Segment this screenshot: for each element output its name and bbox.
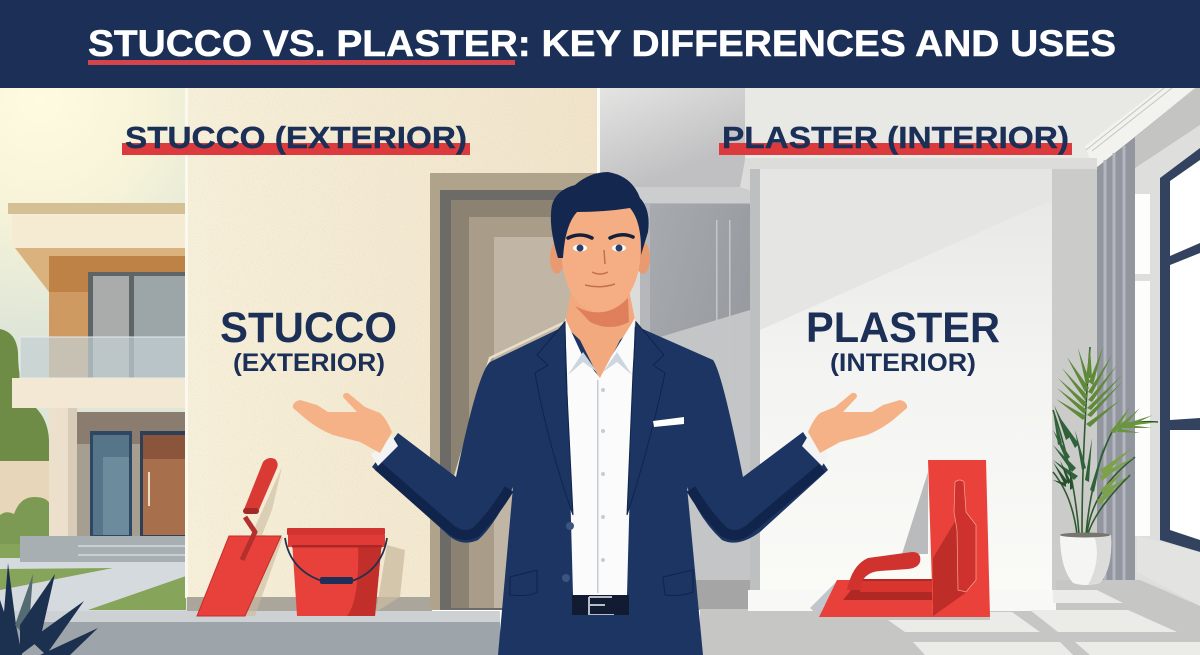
label: plaster: PLASTER — [806, 304, 1000, 352]
house balcony and slab — [12, 337, 186, 408]
pocket square — [653, 417, 684, 427]
door recess — [430, 173, 600, 610]
hair — [551, 172, 649, 258]
label: plaster — [806, 304, 1000, 377]
steps and pathway — [0, 536, 186, 618]
dark left frond leaves — [1053, 405, 1104, 492]
jacket pockets — [510, 570, 693, 596]
house ground floor with doors — [49, 408, 186, 538]
panel: interior room — [600, 88, 1200, 610]
title: STUCCO VS. PLASTER: KEY DIFFERENCES AND USES — [88, 22, 1116, 64]
collar folds — [568, 352, 632, 375]
small dark frond leaves — [1053, 460, 1073, 490]
main frond leaves — [1056, 347, 1122, 427]
neck shadow — [575, 298, 629, 327]
pot — [1060, 532, 1111, 585]
neck — [565, 285, 636, 378]
garden wall and bushes — [0, 461, 50, 545]
side wall — [1052, 168, 1097, 590]
label: plaster: (INTERIOR) — [830, 349, 976, 377]
shoulder highlight — [455, 323, 563, 477]
back wall panelling — [640, 203, 750, 610]
belt — [572, 595, 629, 615]
back wall cornice — [600, 187, 757, 203]
icon: red trowel — [197, 458, 283, 616]
white wall reveals — [1135, 194, 1150, 536]
header bar — [0, 0, 1200, 88]
label: stucco: STUCCO — [220, 304, 397, 352]
left cuff — [371, 436, 398, 466]
icon: potted palm plant — [1053, 347, 1158, 585]
eyes — [573, 244, 626, 252]
sleeve shadows — [378, 466, 822, 535]
heading: plaster interior: PLASTER (INTERIOR) — [722, 120, 1069, 155]
label: stucco — [220, 304, 397, 377]
house upper storey — [8, 203, 186, 378]
face — [562, 205, 640, 312]
shirt placket and buttons — [597, 380, 605, 593]
trousers — [572, 615, 629, 655]
icon: agave plant — [0, 563, 98, 655]
heading: stucco exterior: STUCCO (EXTERIOR) — [125, 120, 467, 155]
lapels — [535, 322, 665, 515]
cornice molding — [1085, 88, 1197, 168]
panel: stucco wall — [185, 88, 599, 611]
window sill — [1137, 536, 1200, 606]
window — [1160, 148, 1200, 552]
curtain — [1097, 137, 1135, 582]
right cuff — [802, 436, 829, 466]
nose and mouth — [585, 250, 615, 287]
upper window wall shade — [1135, 88, 1200, 168]
jacket torso and sleeves — [372, 326, 828, 655]
icon: red bucket — [285, 528, 405, 616]
icon: red plastering float — [810, 460, 990, 617]
window wall — [1135, 125, 1200, 600]
ceiling — [745, 88, 1195, 168]
tree behind house — [0, 329, 49, 461]
right hand — [808, 393, 907, 453]
floor — [0, 580, 1200, 655]
ears — [550, 242, 650, 274]
lower right frond leaves — [1097, 448, 1135, 505]
eyebrows — [568, 235, 633, 238]
upper back wall — [600, 88, 745, 187]
panel: exterior house scene — [0, 88, 187, 618]
panel: column plaster wall — [745, 158, 1097, 611]
left hand — [293, 393, 392, 453]
right frond leaves — [1103, 407, 1158, 440]
white divider — [597, 88, 600, 178]
shirt — [565, 318, 635, 595]
label: stucco: (EXTERIOR) — [233, 349, 385, 377]
jacket buttons — [562, 522, 574, 582]
person in navy suit — [293, 172, 907, 655]
